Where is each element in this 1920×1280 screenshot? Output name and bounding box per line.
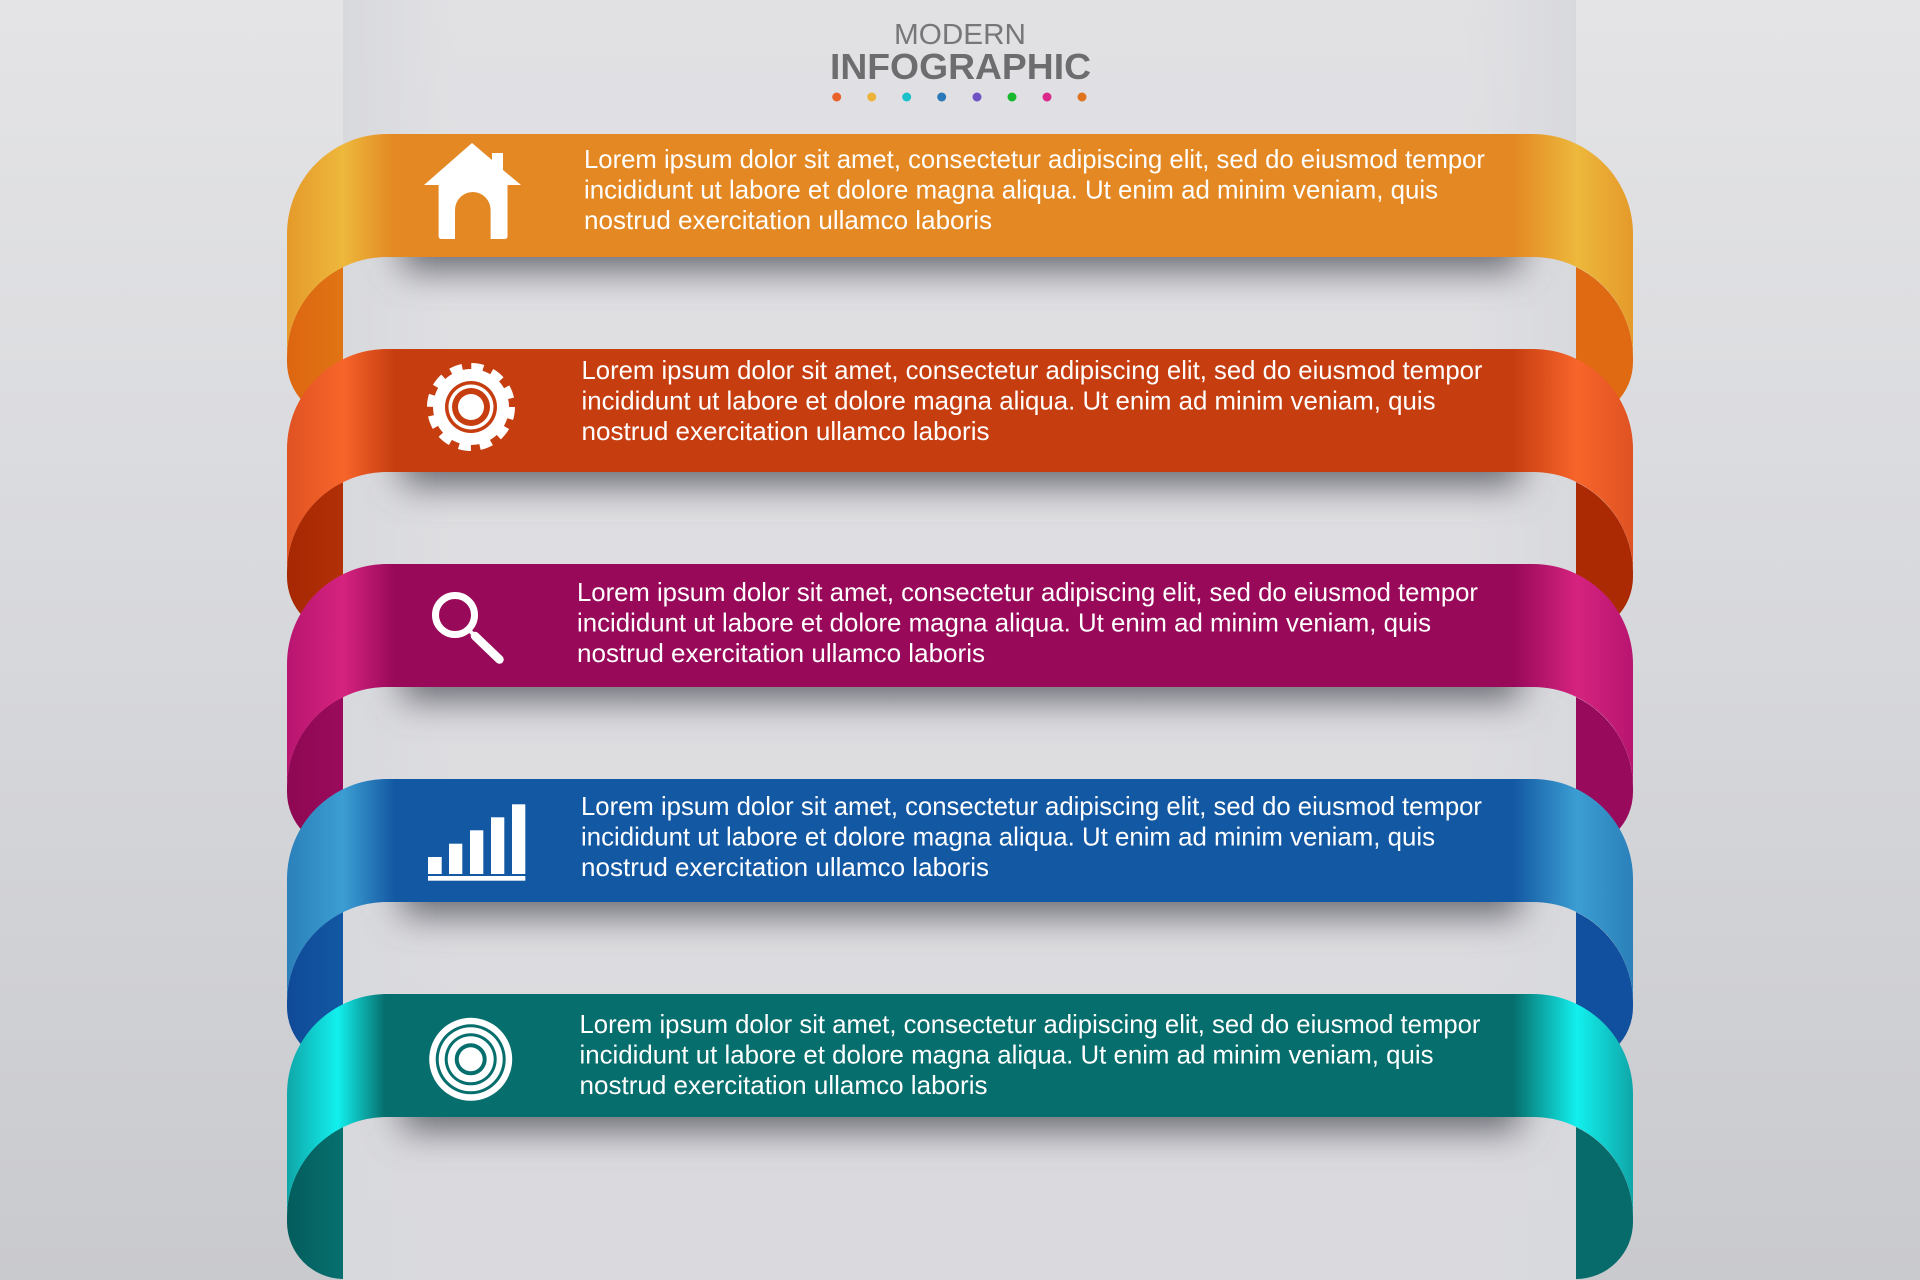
text block: nostrud exercitation ullamco laboris	[580, 1070, 988, 1100]
ribbon back folds	[287, 697, 1633, 849]
band shadow	[402, 200, 1520, 270]
text block: Lorem ipsum dolor sit amet, consectetur adipiscing elit, sed do eiusmod tempor	[580, 1009, 1481, 1039]
panel: blue ribbon	[287, 779, 1633, 1064]
icon: magnifying glass	[436, 596, 500, 660]
text block	[577, 577, 1478, 668]
ribbon band	[287, 779, 1633, 1002]
icon: house	[424, 143, 521, 239]
panel: teal ribbon	[287, 994, 1633, 1279]
text block: nostrud exercitation ullamco laboris	[584, 205, 992, 235]
ribbon back folds	[287, 1127, 1633, 1279]
text block: incididunt ut labore et dolore magna aliqua. Ut enim ad minim veniam, quis	[580, 1040, 1434, 1070]
band shadow	[402, 415, 1520, 485]
panel: orange ribbon	[287, 134, 1633, 419]
band shadow	[402, 1060, 1520, 1130]
text block	[582, 355, 1483, 446]
band shadow	[402, 845, 1520, 915]
text block: Lorem ipsum dolor sit amet, consectetur adipiscing elit, sed do eiusmod tempor	[584, 144, 1485, 174]
ribbon band	[287, 134, 1633, 357]
ribbon band	[287, 564, 1633, 787]
panel: red ribbon	[287, 349, 1633, 634]
text block	[580, 1009, 1481, 1100]
coloured dots	[832, 92, 1086, 102]
icon: gear	[431, 367, 511, 447]
panel: magenta ribbon	[287, 564, 1633, 849]
text block: incididunt ut labore et dolore magna aliqua. Ut enim ad minim veniam, quis	[584, 174, 1438, 204]
ribbon band	[287, 994, 1633, 1217]
text block: Lorem ipsum dolor sit amet, consectetur adipiscing elit, sed do eiusmod tempor	[582, 355, 1483, 385]
heading: MODERN: MODERN	[894, 19, 1026, 51]
text block: Lorem ipsum dolor sit amet, consectetur adipiscing elit, sed do eiusmod tempor	[581, 791, 1482, 821]
text block: incididunt ut labore et dolore magna aliqua. Ut enim ad minim veniam, quis	[582, 386, 1436, 416]
text block	[584, 144, 1485, 235]
ribbon back folds	[287, 267, 1633, 419]
icon: bar chart	[428, 804, 525, 881]
title	[830, 19, 1091, 102]
ribbon back folds	[287, 482, 1633, 634]
ribbon band	[287, 349, 1633, 572]
text block: nostrud exercitation ullamco laboris	[582, 416, 990, 446]
ribbon back folds	[287, 912, 1633, 1064]
icon: target	[429, 1018, 512, 1101]
heading: INFOGRAPHIC: INFOGRAPHIC	[830, 46, 1091, 87]
text block	[581, 791, 1482, 882]
band shadow	[402, 630, 1520, 700]
text block: nostrud exercitation ullamco laboris	[577, 638, 985, 668]
text block: nostrud exercitation ullamco laboris	[581, 852, 989, 882]
text block: incididunt ut labore et dolore magna aliqua. Ut enim ad minim veniam, quis	[581, 822, 1435, 852]
text block: Lorem ipsum dolor sit amet, consectetur adipiscing elit, sed do eiusmod tempor	[577, 577, 1478, 607]
text block: incididunt ut labore et dolore magna aliqua. Ut enim ad minim veniam, quis	[577, 608, 1431, 638]
